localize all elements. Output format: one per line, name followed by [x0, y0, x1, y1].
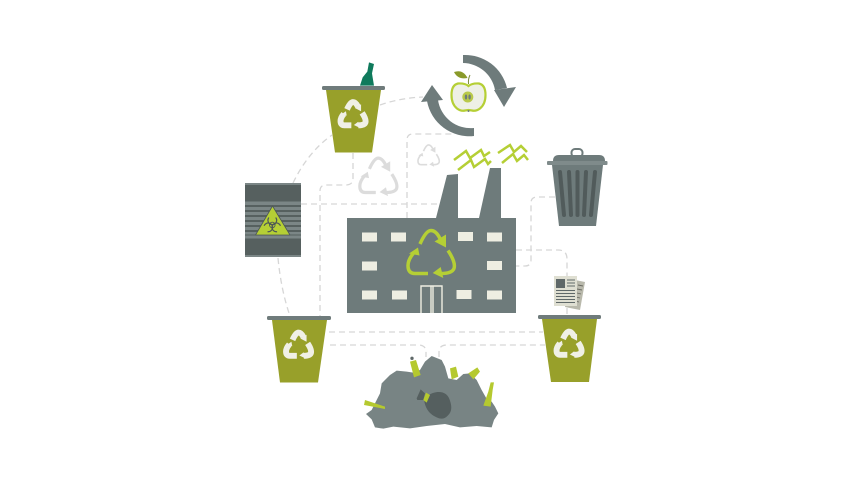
icon: zigzag smoke: [454, 145, 528, 170]
icon: biohazard barrel: [245, 183, 301, 257]
icon: apple with cycle arrows: [421, 55, 516, 136]
icon: left recycling bin: [267, 316, 331, 382]
icon: factory: [347, 168, 516, 313]
icon: factory recycling symbol: [408, 230, 454, 278]
icon: trash can: [547, 149, 608, 226]
icon: large light recycling symbol: [360, 158, 397, 196]
arrow: top cycle arrow: [463, 55, 516, 107]
icon: apple: [452, 71, 486, 112]
icon: garbage pile: [364, 356, 498, 429]
arrow: bottom cycle arrow: [421, 85, 474, 136]
icon: trash bag: [417, 389, 451, 419]
icon: green bottle: [360, 62, 374, 86]
icon: top recycling bin with bottle: [322, 62, 385, 152]
dashed connectors: [278, 97, 567, 357]
icon: right recycling bin: [538, 315, 601, 382]
door: [421, 286, 442, 313]
icon: hazard triangle: [256, 206, 290, 235]
icon: newspapers: [554, 276, 585, 310]
icon: small light recycling symbol: [418, 145, 439, 167]
